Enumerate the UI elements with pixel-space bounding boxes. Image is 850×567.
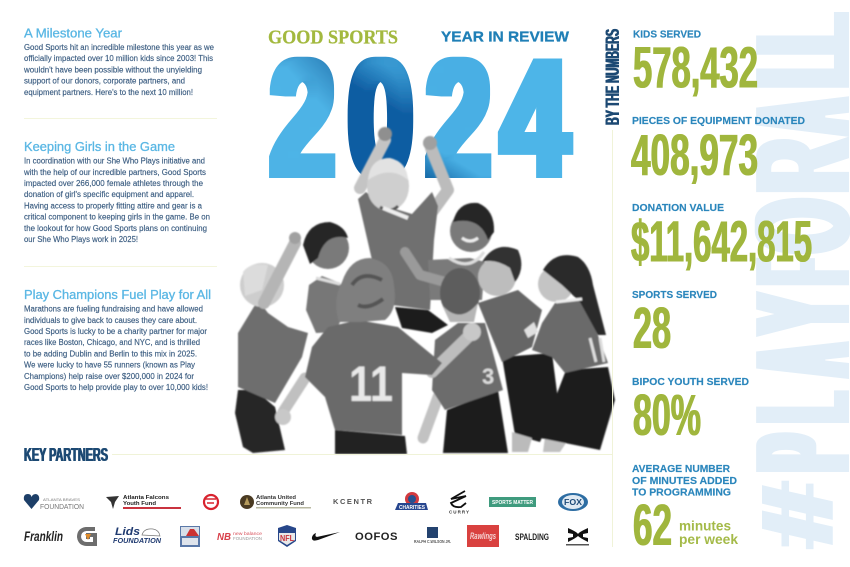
- logo: Lids Foundation: FOUNDATION: [113, 538, 162, 545]
- story: A Milestone Year: A Milestone Year: [24, 26, 122, 40]
- logo: New Balance Foundation: NB: [217, 532, 231, 543]
- logo: Lids Foundation: Lids: [115, 526, 140, 538]
- story: Keeping Girls in the Game: Keeping Girls in the Game: [24, 140, 175, 154]
- logo: Good Sports: GOOD SPORTS: [268, 26, 398, 48]
- logo: Franklin: Franklin: [24, 528, 63, 544]
- logo: Spalding: SPALDING: [515, 532, 549, 542]
- logo: New Balance Foundation: [217, 531, 263, 543]
- story: Keeping Girls in the Game: donation of girl's specific equipment and apparel.: [24, 190, 194, 199]
- logo: Fox Sports: FOX: [564, 498, 583, 507]
- logo: Nike swoosh: [312, 532, 340, 541]
- story: Play Champions Fuel Play for All: Marathons are fueling fundraising and have allowed: [24, 305, 203, 314]
- logo: Atlanta Falcons Youth Fund: Atlanta Falcons: [123, 495, 169, 501]
- story: Play Champions Fuel Play for All: Good Sports to help provide play to over 10,000 kids!: [24, 383, 208, 392]
- story: Keeping Girls in the Game: with the help of our incredible partners, Good Sports: [23, 168, 206, 177]
- panel: statistics: [631, 30, 812, 558]
- kid: raised girl in centre: [358, 127, 448, 333]
- logo: Atlanta United Community Fund: Community Fund: [256, 501, 304, 507]
- story: Play Champions Fuel Play for All: individuals to give back to causes they care about.: [24, 316, 197, 325]
- story: A Milestone Year: support of our donors, corporate partners, and: [24, 77, 185, 86]
- logo: Cubs Charities: CHARITIES: [399, 505, 426, 511]
- logo: New Balance Foundation: FOUNDATION: [233, 536, 262, 541]
- logo: Ralph C. Wilson Jr. Foundation: RALPH C.WILSON JR.: [414, 539, 451, 544]
- logo: MLB Urban Youth Academy: [180, 526, 200, 547]
- stat: average minutes added: minutes: [679, 519, 731, 534]
- big year numerals 2024: 0: [348, 26, 413, 210]
- photo: group of cheering kids: [235, 127, 615, 454]
- big year numerals 2024: 2: [426, 26, 491, 210]
- stat: kids served: 578,432: [633, 36, 758, 100]
- logo: Sports Matter: [489, 497, 536, 507]
- stat: kids served: KIDS SERVED: [633, 30, 701, 40]
- logo: Fox Sports: [558, 493, 588, 511]
- stat: donation value: DONATION VALUE: [632, 203, 724, 214]
- logo: Rawlings: Rawlings: [470, 531, 496, 541]
- logo: Under Armour: [566, 528, 589, 546]
- stat: average minutes added: 62: [633, 493, 672, 558]
- story: Play Champions Fuel Play for All: to be adding Dublin and Berlin to this mix in 2025.: [24, 349, 197, 358]
- story: Play Champions Fuel Play for All: Champions) help raise over $200,000 in 2024 for: [24, 372, 194, 381]
- story: Play Champions Fuel Play for All: Play Champions Fuel Play for All: [24, 288, 211, 302]
- logo: Sports Matter: SPORTS MATTER: [492, 500, 533, 506]
- heading: Key Partners: KEY PARTNERS: [24, 444, 108, 465]
- background hashtag #PLAYFORALL: [727, 15, 850, 546]
- stat: kids served: [633, 30, 758, 100]
- stat: sports served: 28: [633, 296, 671, 361]
- story: Keeping Girls in the Game: [23, 140, 210, 244]
- stat: BIPOC youth served: 80%: [633, 383, 701, 448]
- big year numerals 2024: [270, 26, 569, 210]
- story: Keeping Girls in the Game: critical component to keeping girls in the game. Be on: [24, 213, 210, 222]
- logo: Curry: [449, 491, 469, 514]
- logo: Centr: KCENTR: [333, 497, 373, 506]
- heading: Year in Review: YEAR IN REVIEW: [441, 28, 570, 46]
- kid: child in number 11 jersey: [275, 258, 481, 454]
- logo: Atlanta Hawks: [204, 495, 218, 509]
- stat: average minutes added: per week: [679, 532, 738, 547]
- logo: New Balance Foundation: new balance: [233, 531, 263, 536]
- story: Play Champions Fuel Play for All: Good Sports is lucky to be a charity partner for major: [24, 327, 207, 336]
- logo: NFL: [278, 525, 296, 547]
- story: Keeping Girls in the Game: Having access to properly fitting attire and gear is a: [24, 201, 203, 210]
- story: A Milestone Year: wouldn't have been possible without the unyielding: [23, 65, 202, 74]
- stat: sports served: [632, 290, 717, 361]
- logo: Gatorade: [79, 529, 95, 544]
- story: A Milestone Year: equipment partners. Here's to the next 10 million!: [24, 88, 193, 97]
- logo: Atlanta Braves Foundation: FOUNDATION: [40, 504, 84, 511]
- logo: Atlanta United Community Fund: Atlanta United: [256, 495, 296, 501]
- story: Keeping Girls in the Game: the lookout for how Good Sports plans on continuing: [24, 224, 207, 233]
- stat: BIPOC youth served: BIPOC YOUTH SERVED: [632, 377, 749, 388]
- stat: pieces of equipment donated: PIECES OF EQUIPMENT DONATED: [632, 116, 805, 127]
- stat: sports served: SPORTS SERVED: [632, 290, 717, 301]
- kid: boy from behind with number 3: 3: [482, 364, 494, 389]
- kid: boy from behind with number 3: [423, 268, 508, 453]
- kid: girl on left with braided hair: [303, 222, 349, 333]
- stat: average minutes added: AVERAGE NUMBER: [632, 464, 730, 475]
- logo: Lids Foundation: [113, 526, 162, 545]
- logo: Atlanta Falcons Youth Fund: [106, 495, 181, 509]
- stat: average minutes added: [632, 464, 738, 558]
- kid: smiling girl upper right: [405, 203, 494, 300]
- kid: boy with dark hair: [478, 247, 558, 452]
- logo: Rawlings: [467, 525, 499, 547]
- story: A Milestone Year: Good Sports hit an incredible milestone this year as we: [24, 43, 215, 52]
- logo: Cubs Charities: [395, 492, 428, 511]
- logo: Atlanta Braves Foundation: ATLANTA BRAVES: [43, 497, 80, 502]
- panel: partner logos: [24, 491, 589, 547]
- kid: girl on right with long braid: [532, 255, 615, 452]
- logo: Atlanta Braves Foundation: [24, 494, 84, 511]
- panel: left stories: [23, 26, 217, 392]
- logo: Atlanta Falcons Youth Fund: Youth Fund: [123, 501, 156, 507]
- logo: Oofos: OOFOS: [355, 531, 398, 543]
- story: Play Champions Fuel Play for All: We were lucky to have 55 runners (known as Play: [24, 361, 195, 370]
- logo: Curry: CURRY: [449, 510, 469, 514]
- story: A Milestone Year: officially impacted over 10 million kids since 2003! This: [24, 54, 213, 63]
- big year numerals 2024: 2: [270, 26, 335, 210]
- story: A Milestone Year: [23, 26, 215, 97]
- story: Play Champions Fuel Play for All: races like Boston, Chicago, and NYC, and is thrilled: [24, 338, 200, 347]
- stat: average minutes added: OF MINUTES ADDED: [632, 476, 737, 487]
- stat: average minutes added: TO PROGRAMMING: [632, 488, 731, 498]
- big year numerals 2024: 4: [501, 26, 569, 210]
- kid: child in number 11 jersey: 11: [349, 356, 393, 412]
- stat: pieces of equipment donated: 408,973: [631, 123, 758, 188]
- story: Play Champions Fuel Play for All: [24, 288, 211, 392]
- logo: Atlanta United Community Fund: [240, 495, 311, 509]
- logo: NFL: NFL: [280, 534, 294, 543]
- kid: boy far left: [235, 232, 308, 453]
- story: Keeping Girls in the Game: impacted over 266,000 female athletes through the: [24, 179, 204, 188]
- logo: Ralph C. Wilson Jr. Foundation: [414, 527, 451, 544]
- story: Keeping Girls in the Game: In coordination with our She Who Plays initiative and: [24, 157, 205, 166]
- story: Keeping Girls in the Game: our She Who Plays work in 2025!: [24, 235, 138, 244]
